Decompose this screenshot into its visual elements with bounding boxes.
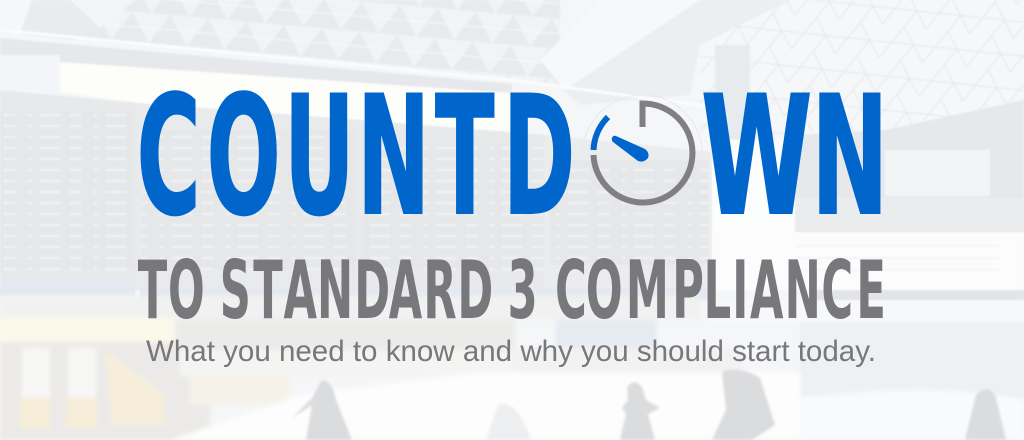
letter: N: N [811, 62, 888, 252]
clock hand [612, 136, 649, 162]
departure boards [0, 90, 712, 300]
check-in kiosks and counters [0, 296, 1024, 440]
ceiling [0, 0, 1024, 140]
travellers silhouettes [292, 370, 1006, 440]
subtitle: TO STANDARD 3 COMPLIANCE [138, 245, 886, 338]
tagline: What you need to know and why you should start today. [146, 335, 876, 368]
title: COUNTDOWN [137, 61, 888, 253]
blue elapsed arc [594, 117, 608, 150]
clock ring [594, 103, 692, 202]
icon: stopwatch in place of the letter O [594, 103, 692, 202]
faint clock halo [582, 95, 702, 215]
right side hall [712, 100, 1024, 397]
letter: W: W [701, 62, 812, 253]
word: COUNTD: COUNTD [137, 61, 575, 252]
